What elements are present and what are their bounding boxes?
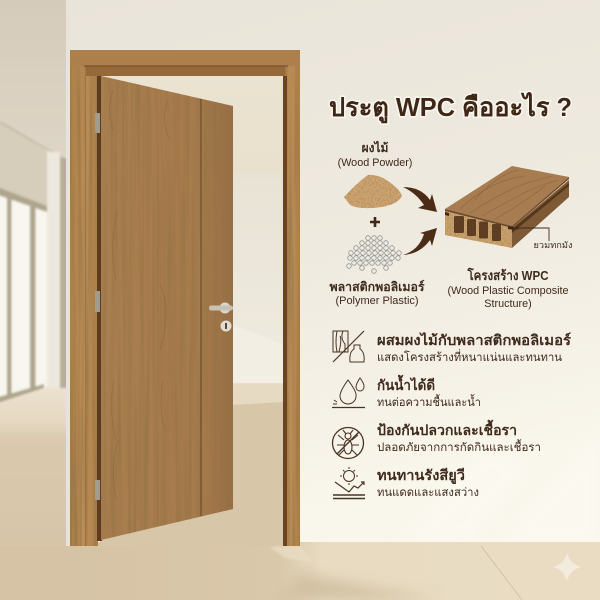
white wall edge [66,0,70,546]
door frame [70,50,300,546]
frame left jamb [70,50,98,546]
hinge bottom [95,480,100,500]
sunlight on wall [400,430,600,600]
callout label: ยวมทกมัง [534,240,572,250]
feature: UV resistant [333,467,479,499]
structure English line 2: Structure) [484,298,532,310]
icon: water drops [332,378,365,408]
feature 4 heading: ทนทานรังสียูวี [377,467,465,484]
left floor [0,388,70,600]
feature 2 description: ทนต่อความชื้นและน้ำ [377,394,481,409]
sparkle watermark [553,553,581,581]
title: ประตู WPC คืออะไร ? [329,91,572,124]
key escutcheon [220,320,232,332]
arrow: powder to board [403,187,437,212]
icon: wood powder pile [344,175,402,208]
label: WPC structure [447,267,569,310]
hinge top [95,113,100,133]
far floor light [233,383,284,405]
frame dark shadow line [84,65,288,67]
icon: polymer pellets [349,238,401,271]
feature: waterproof [332,374,481,409]
frame head lower band [86,66,285,76]
feature: termite and mold [332,419,541,458]
curtain [47,152,60,388]
left wall band [0,119,47,208]
label: polymer plastic [330,279,425,307]
board tongue slots [445,212,514,230]
chamber four [492,224,501,241]
curtain shadow [60,158,70,388]
wood powder English: (Wood Powder) [338,157,412,169]
board side face [512,180,569,248]
left room [0,0,70,600]
board front core [445,211,512,248]
far wall light [233,325,284,383]
arrow: pellets to board [403,228,437,255]
cornice line [0,122,66,160]
key hole [225,323,227,329]
board top grain [460,170,558,219]
icon: sun and reflected rays [333,467,365,498]
view through doorway [100,76,284,546]
left ceiling [0,0,70,163]
feature 2 heading: กันน้ำได้ดี [377,374,435,393]
board top surface [445,166,569,226]
structure Thai: โครงสร้าง WPC [467,267,549,283]
board side groove [512,183,569,233]
structure English line 1: (Wood Plastic Composite [447,285,569,297]
floor tile line [481,546,522,600]
door stop right [283,76,287,546]
hinge middle [95,291,100,312]
pellet fill [349,238,401,271]
polymer Thai: พลาสติกพอลิเมอร์ [330,279,425,294]
far wall [100,76,284,384]
wood powder Thai: ผงไม้ [362,140,388,155]
feature 1 heading: ผสมผงไม้กับพลาสติกพอลิเมอร์ [377,331,572,348]
board top edge [445,177,569,228]
feature 3 heading: ป้องกันปลวกและเชื้อรา [377,419,517,438]
frame right jamb [283,50,300,546]
floor shadow [280,574,440,600]
pellet outlines [349,238,401,271]
icon: wood and bottle [333,331,364,362]
label: wood powder [338,140,412,169]
door panel [101,76,233,540]
polymer English: (Polymer Plastic) [335,295,419,307]
windows [0,194,47,400]
left room floor join [0,546,70,600]
floor sun patch [270,545,312,562]
plus sign [370,217,380,227]
chamber two [467,219,476,236]
feature: composite [333,331,572,364]
far floor [100,383,284,546]
window frame [0,186,47,404]
feature 3 description: ปลอดภัยจากการกัดกินและเชื้อรา [377,439,541,454]
callout leader [517,228,549,241]
foreground floor [66,542,600,600]
hollow chamber one [454,216,464,233]
feature 1 description: แสดงโครงสร้างที่หนาแน่นและทนทาน [377,349,562,364]
frame head [70,50,300,66]
door groove [200,99,202,516]
chamber three [479,222,488,238]
feature 4 description: ทนแดดและแสงสว่าง [377,487,479,499]
handle rosette [220,302,230,314]
wood cathedral grain [110,90,170,500]
WPC board [445,166,569,248]
door stop left [97,76,102,541]
callout dot [515,226,519,230]
handle lever [209,306,233,310]
frame seam left [84,66,86,546]
door leaf [95,76,233,540]
icon: no termite [332,428,364,458]
